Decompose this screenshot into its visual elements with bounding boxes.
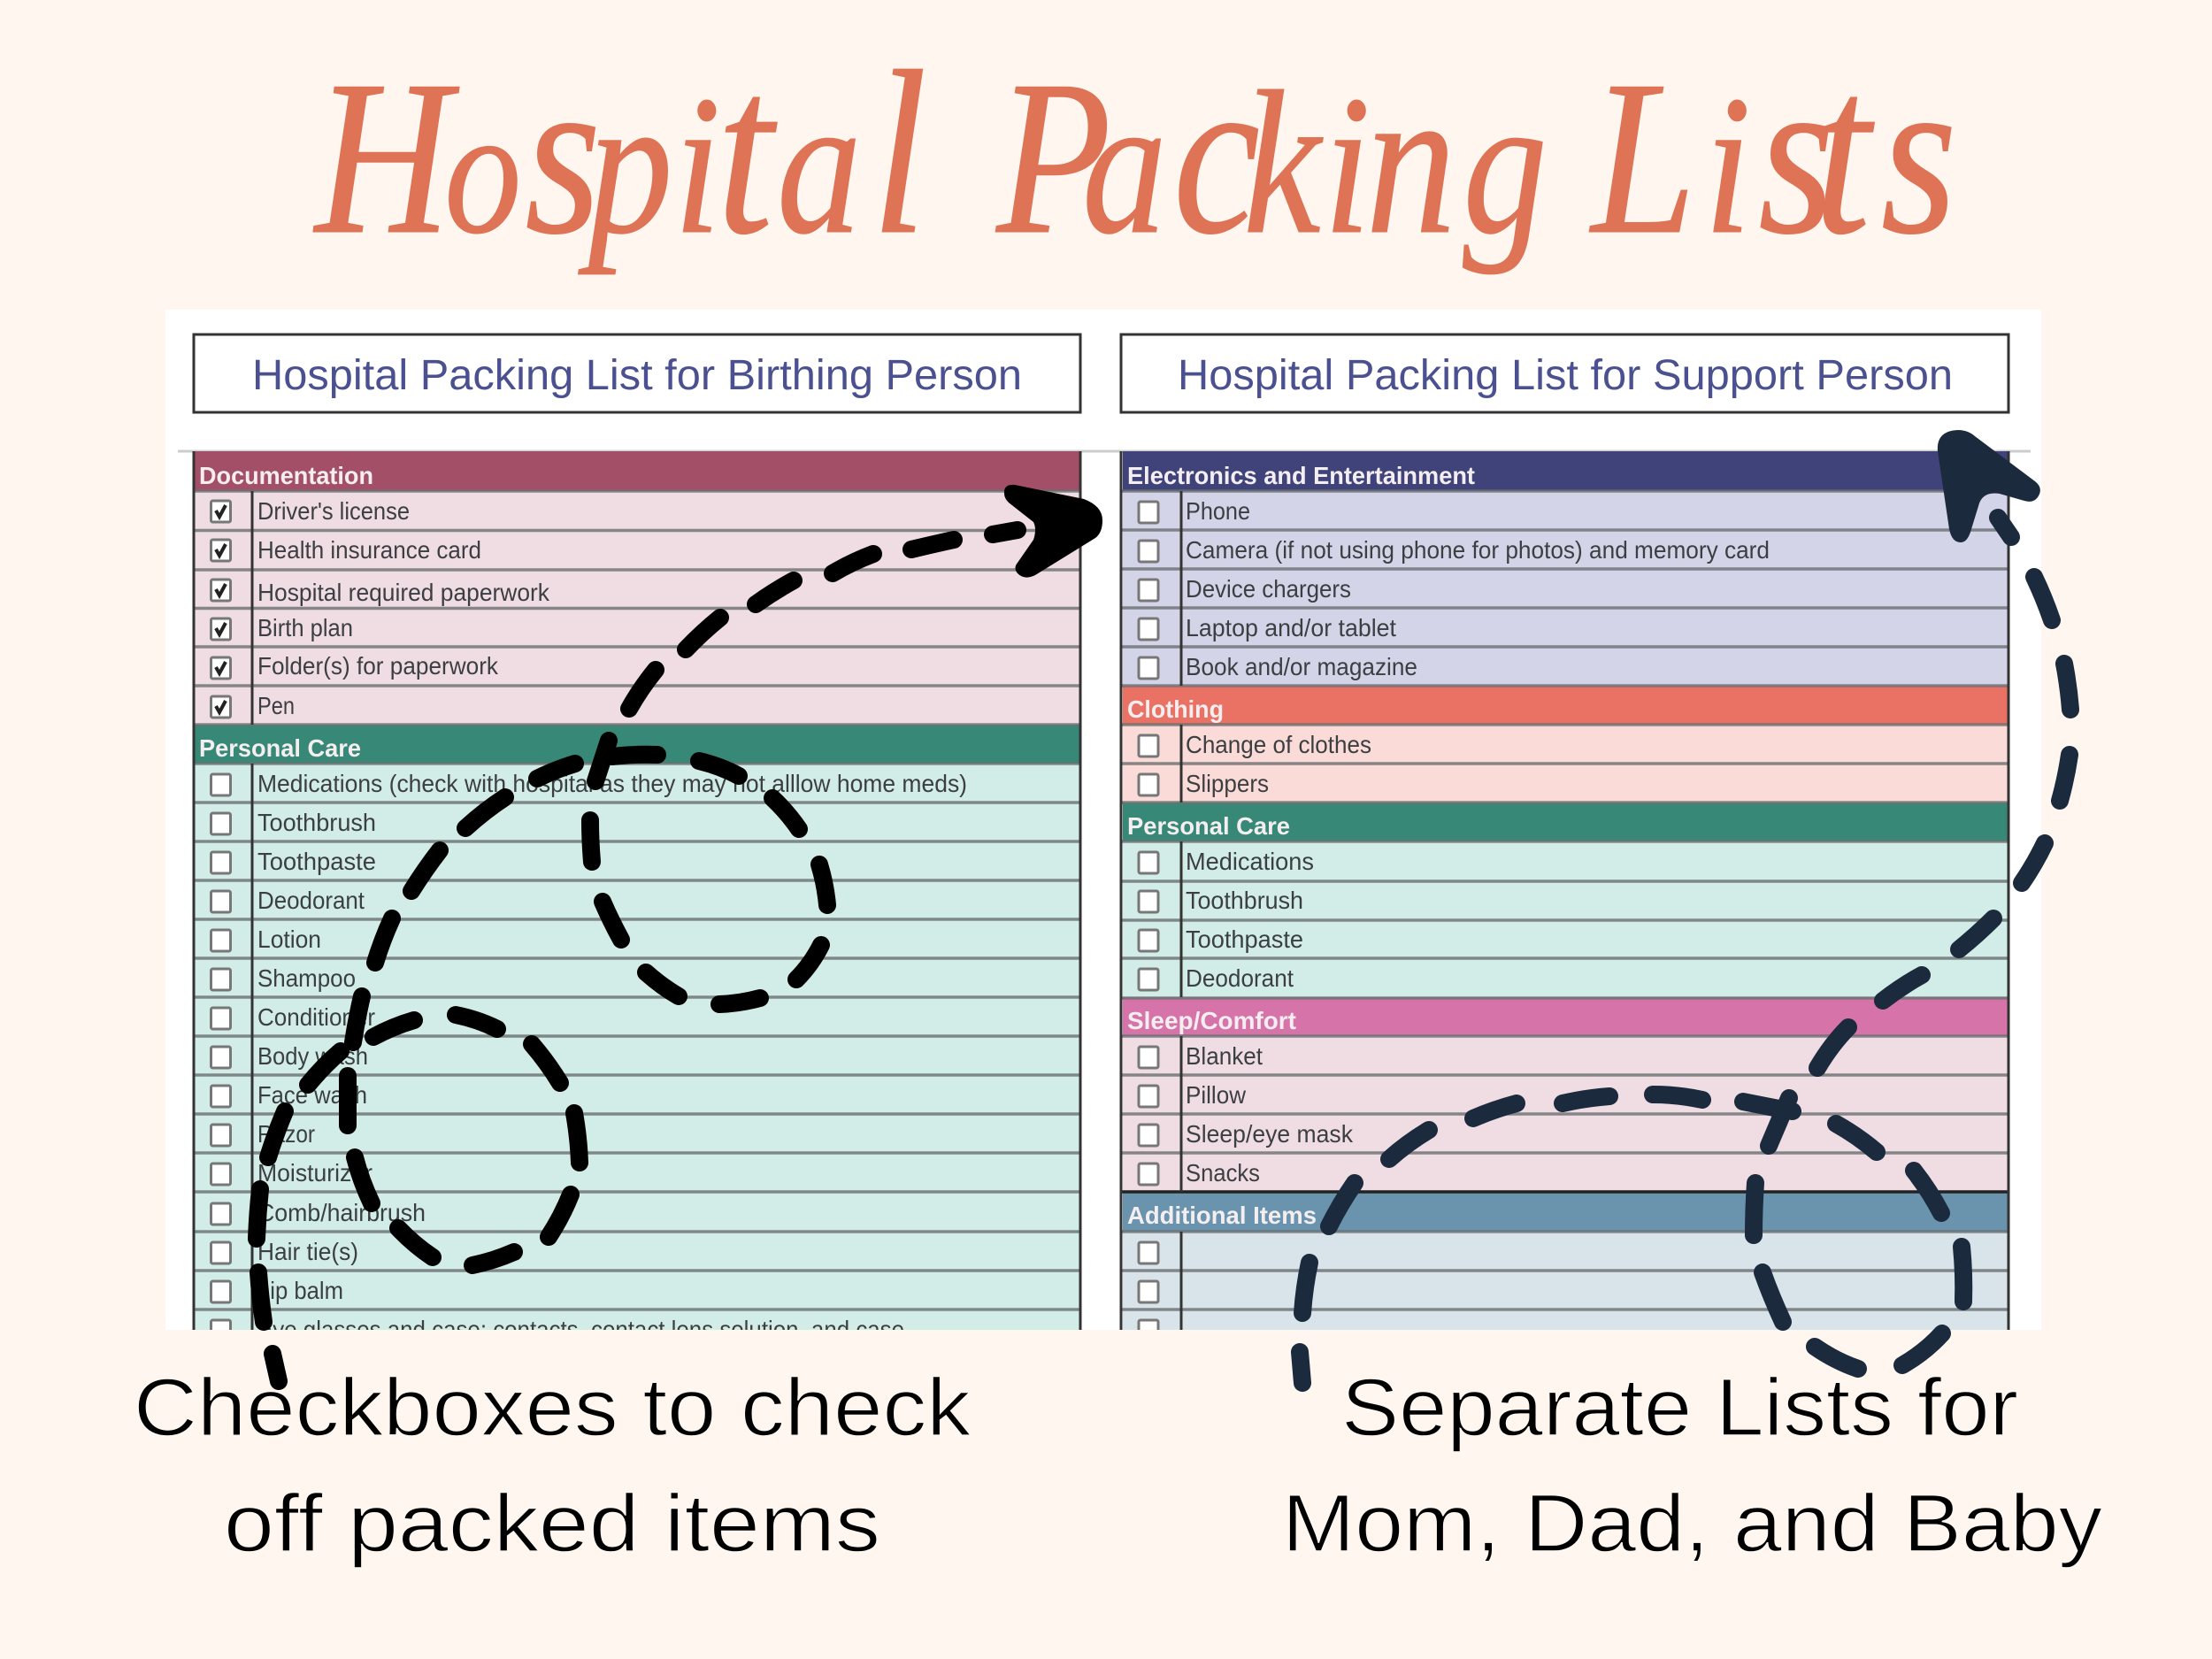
- section: personal care: Lip balm: [257, 1277, 343, 1304]
- title: [312, 20, 1957, 284]
- title: t: [1814, 20, 1875, 284]
- arrow: black dashed looping arrow: [257, 485, 1102, 1381]
- section: personal care: Personal Care: [1127, 812, 1290, 840]
- title: s: [1758, 27, 1834, 282]
- section: electronics and entertainment: Phone: [1186, 497, 1250, 525]
- section: personal care: Eye glasses and case; contacts, contact lens solution, and case: [257, 1316, 904, 1343]
- section: documentation: Pen: [257, 692, 295, 719]
- section: personal care: [194, 725, 1080, 1365]
- title: t: [717, 20, 778, 284]
- section: documentation: Health insurance card: [257, 536, 481, 564]
- section: clothing: Change of clothes: [1186, 731, 1371, 758]
- title: s: [1881, 27, 1957, 282]
- section: sleep and comfort: Sleep/Comfort: [1127, 1007, 1296, 1034]
- section: personal care: Toothbrush: [257, 809, 376, 836]
- caption: separate lists: Separate Lists for: [1341, 1363, 2018, 1453]
- section: documentation: Birth plan: [257, 614, 353, 641]
- heading box: support person: [1121, 334, 2008, 412]
- icon: navy arrowhead: [1938, 430, 2040, 542]
- section: personal care: [1121, 803, 2008, 997]
- caption: separate lists: Mom, Dad, and Baby: [1282, 1479, 2102, 1569]
- section: personal care: Shampoo: [257, 964, 356, 992]
- section: personal care: Toothpaste: [1186, 926, 1303, 953]
- caption: checkboxes: [134, 1363, 972, 1569]
- section: personal care: Toothbrush: [1186, 887, 1303, 914]
- title: H: [312, 35, 459, 280]
- section: sleep and comfort: Blanket: [1186, 1042, 1263, 1070]
- section: personal care: Toothpaste: [257, 848, 376, 875]
- section: personal care: Medications (check with hospital as they may not alllow home meds): [257, 770, 967, 797]
- section: personal care: Body wash: [257, 1042, 368, 1070]
- title: p: [578, 56, 672, 276]
- section: electronics and entertainment: Device chargers: [1186, 575, 1351, 603]
- panel: birthing person list: [194, 334, 1080, 1365]
- section: additional items: [1121, 1192, 2008, 1356]
- panel: support person list: [1121, 334, 2008, 1356]
- panel: white sheet: [165, 310, 2041, 1330]
- section: electronics and entertainment: Laptop and/or tablet: [1186, 614, 1396, 641]
- section: documentation: Documentation: [199, 462, 373, 489]
- caption: checkboxes: Checkboxes to check: [134, 1363, 972, 1453]
- caption: checkboxes: off packed items: [224, 1479, 880, 1569]
- title: n: [1366, 44, 1456, 279]
- title: i: [1704, 56, 1751, 276]
- section: personal care: Deodorant: [257, 887, 365, 914]
- section: personal care: Moisturizer: [257, 1159, 373, 1187]
- section: additional items: Additional Items: [1127, 1202, 1317, 1229]
- heading box: birthing person: Hospital Packing List for Birthing Person: [252, 352, 1022, 399]
- section: documentation: Driver's license: [257, 497, 410, 525]
- section: documentation: Folder(s) for paperwork: [257, 652, 499, 680]
- section: clothing: Slippers: [1186, 770, 1269, 797]
- section: personal care: Medications: [1186, 848, 1314, 875]
- title: g: [1463, 56, 1548, 276]
- section: personal care: Deodorant: [1186, 964, 1294, 992]
- section: documentation: Hospital required paperwork: [257, 579, 550, 606]
- title: P: [995, 35, 1111, 280]
- arrow: navy dashed looping arrow: [1300, 430, 2070, 1383]
- title: k: [1243, 49, 1324, 277]
- title: l: [872, 24, 927, 283]
- section: electronics and entertainment: Electronics and Entertainment: [1127, 462, 1475, 489]
- title: L: [1589, 35, 1696, 280]
- section: personal care: Lotion: [257, 926, 321, 953]
- caption: separate lists: [1282, 1363, 2102, 1569]
- section: sleep and comfort: Pillow: [1186, 1081, 1247, 1109]
- section: sleep and comfort: Sleep/eye mask: [1186, 1120, 1354, 1148]
- title: i: [674, 56, 721, 276]
- section: documentation: [194, 451, 1080, 725]
- section: electronics and entertainment: Book and/or magazine: [1186, 653, 1417, 680]
- title: i: [1324, 56, 1371, 276]
- section: personal care: Conditioner: [257, 1003, 375, 1031]
- icon: black arrowhead: [1004, 485, 1102, 578]
- heading box: birthing person: [194, 334, 1080, 412]
- section: clothing: Clothing: [1127, 695, 1224, 723]
- section: clothing: [1121, 686, 2008, 803]
- title: c: [1173, 27, 1260, 282]
- title: a: [1082, 56, 1167, 276]
- title: s: [525, 27, 601, 282]
- section: sleep and comfort: Snacks: [1186, 1159, 1260, 1187]
- section: personal care: Personal Care: [199, 734, 361, 762]
- section: personal care: Comb/hairbrush: [257, 1199, 426, 1226]
- section: sleep and comfort: [1121, 997, 2008, 1192]
- title: a: [777, 56, 862, 276]
- title: o: [444, 71, 521, 272]
- section: personal care: Razor: [257, 1120, 315, 1148]
- section: electronics and entertainment: [1121, 451, 2008, 686]
- section: personal care: Hair tie(s): [257, 1238, 358, 1265]
- section: electronics and entertainment: Camera (if not using phone for photos) and memory card: [1186, 536, 1770, 564]
- heading box: support person: Hospital Packing List for Support Person: [1178, 352, 1953, 399]
- section: personal care: Face wash: [257, 1081, 367, 1109]
